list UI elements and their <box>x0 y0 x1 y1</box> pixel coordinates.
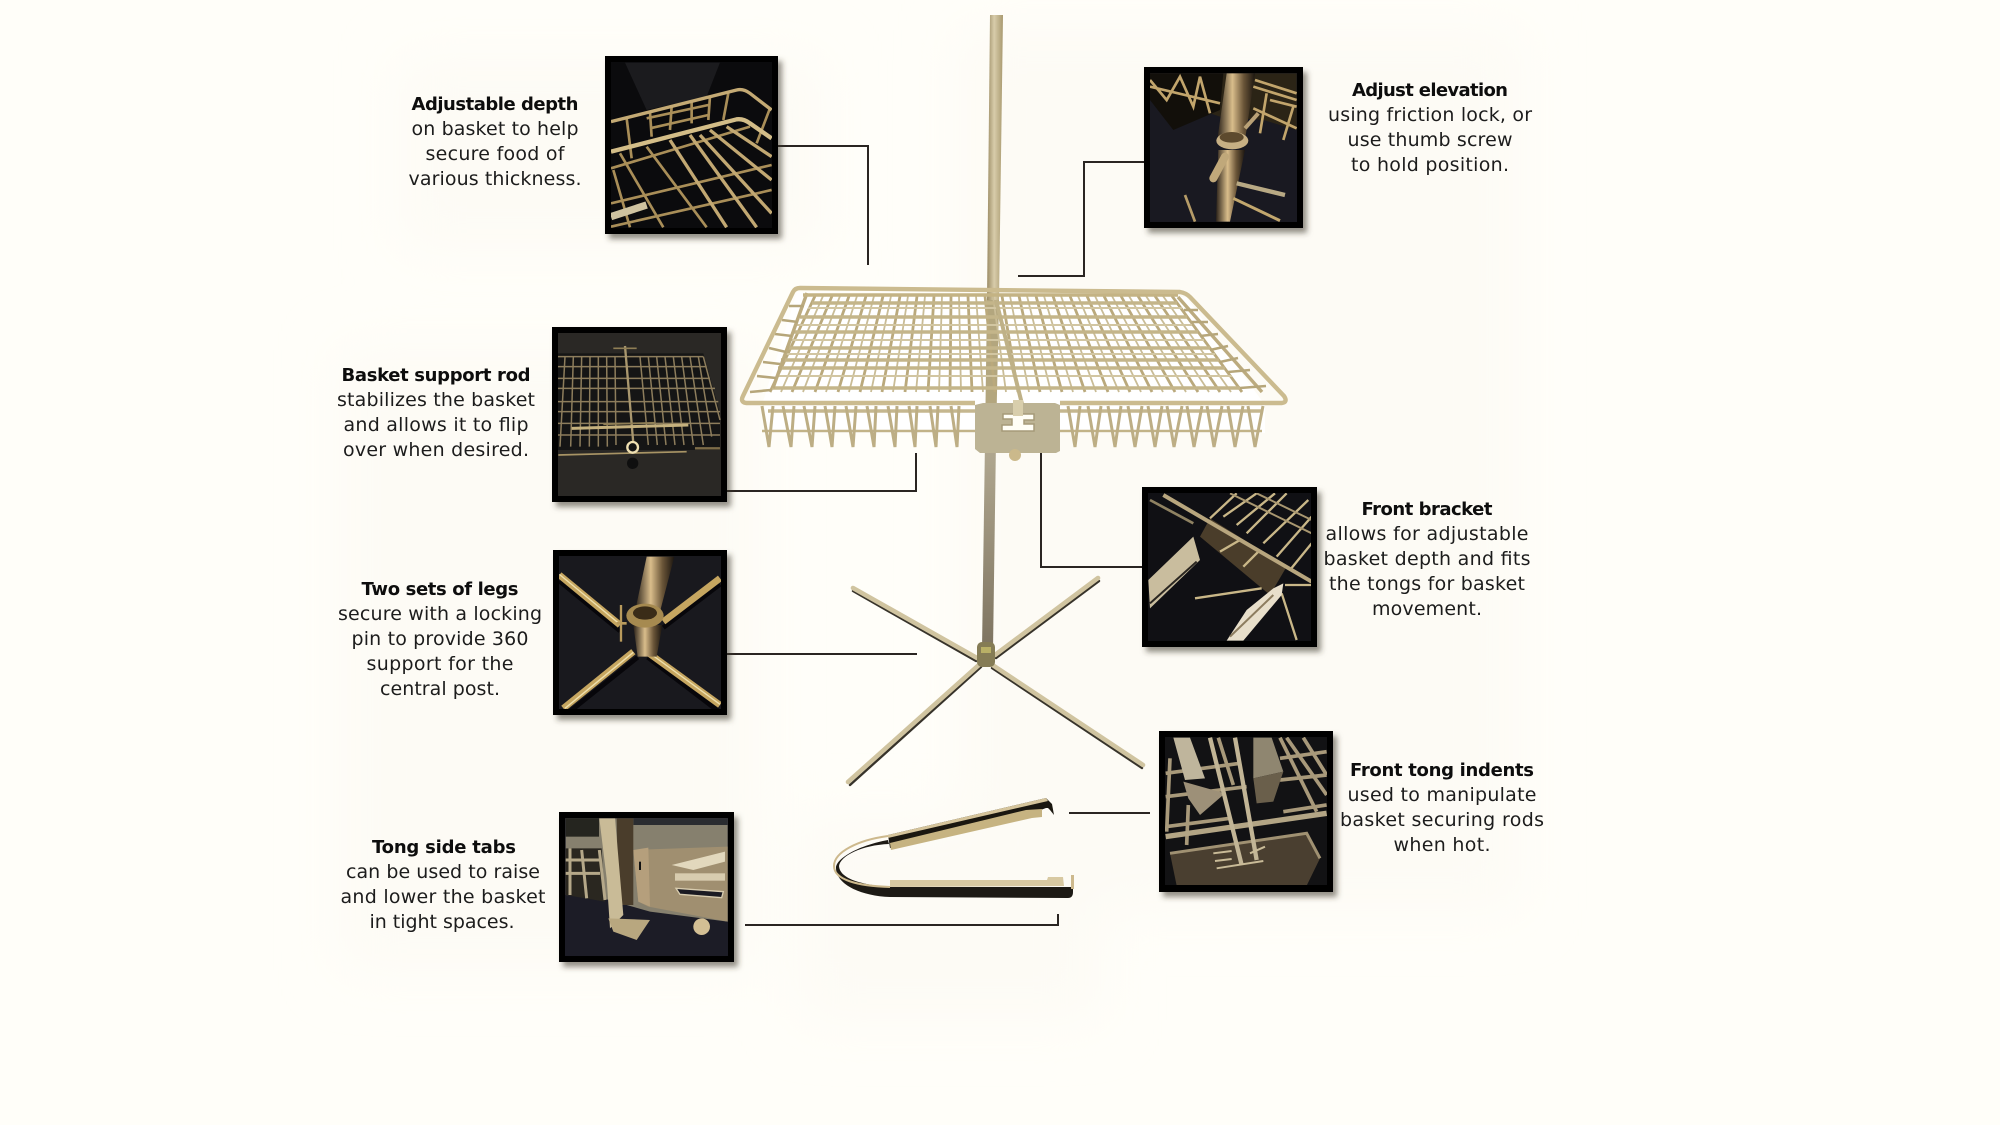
text: adjust elevation: to hold position. <box>1351 154 1509 176</box>
leader line: front bracket <box>1041 453 1142 567</box>
text: basket support rod: over when desired. <box>343 439 529 461</box>
text: basket support rod: stabilizes the basket <box>337 389 535 411</box>
text: adjustable depth: secure food of <box>426 143 566 165</box>
text: adjust elevation: Adjust elevation <box>1352 80 1508 101</box>
text: adjust elevation <box>1328 80 1532 176</box>
text: two sets of legs: central post. <box>380 678 500 700</box>
text: adjustable depth: various thickness. <box>408 168 582 190</box>
text: basket support rod: and allows it to flip <box>344 414 528 436</box>
stand legs <box>848 578 1143 785</box>
text: basket support rod: Basket support rod <box>342 365 530 386</box>
text: tong side tabs: can be used to raise <box>346 861 540 883</box>
text: front bracket: basket depth and fits <box>1324 548 1530 570</box>
central post <box>982 15 1003 650</box>
leader line: two sets of legs <box>727 653 917 655</box>
text: two sets of legs <box>338 579 542 700</box>
callout: tong side tabs <box>340 812 734 962</box>
text: adjustable depth <box>408 94 582 190</box>
photo: locking pin and legs detail <box>553 550 727 715</box>
text: two sets of legs: support for the <box>366 653 514 675</box>
text: two sets of legs: Two sets of legs <box>362 579 518 600</box>
text: front tong indents: Front tong indents <box>1350 760 1534 781</box>
text: tong side tabs: and lower the basket <box>340 886 546 908</box>
tongs <box>834 798 1074 898</box>
text: adjust elevation: using friction lock, or <box>1328 104 1532 126</box>
text: front bracket: the tongs for basket <box>1329 573 1525 595</box>
infographic: basket stand with feature callouts <box>338 15 1544 972</box>
text: front bracket: Front bracket <box>1362 499 1493 520</box>
photo: front bracket detail <box>1142 487 1317 647</box>
text: adjust elevation: use thumb screw <box>1348 129 1512 151</box>
text: adjustable depth: Adjustable depth <box>412 94 578 115</box>
text: front tong indents: when hot. <box>1394 834 1490 856</box>
callout: front tong indents <box>1159 731 1544 892</box>
text: tong side tabs: Tong side tabs <box>372 837 516 858</box>
leader line: adjust elevation <box>1018 162 1144 276</box>
text: front tong indents <box>1340 760 1544 856</box>
text: front bracket <box>1324 499 1530 620</box>
text: adjustable depth: on basket to help <box>412 118 578 140</box>
text: front bracket: movement. <box>1372 598 1482 620</box>
callout: adjustable depth <box>408 56 778 234</box>
photo: tong indents detail <box>1159 731 1333 892</box>
product photo: basket stand <box>742 15 1286 898</box>
callout: front bracket <box>1142 487 1530 647</box>
photo: friction lock detail <box>1144 67 1303 228</box>
leader line: tong side tabs <box>745 914 1058 925</box>
leader line: basket support rod <box>727 453 916 491</box>
front bracket on basket <box>975 400 1060 461</box>
photo: side tab detail <box>559 812 734 962</box>
text: front tong indents: basket securing rods <box>1340 809 1544 831</box>
callout: two sets of legs <box>338 550 727 715</box>
callout: basket support rod <box>337 327 727 502</box>
text: tong side tabs <box>340 837 546 933</box>
text: basket support rod <box>337 365 535 461</box>
text: two sets of legs: pin to provide 360 <box>352 628 528 650</box>
wire basket <box>742 288 1286 447</box>
photo: support rod detail <box>552 327 727 502</box>
text: front tong indents: used to manipulate <box>1348 784 1536 806</box>
callout: adjust elevation <box>1144 67 1532 228</box>
text: front bracket: allows for adjustable <box>1326 523 1528 545</box>
leader line: adjustable depth <box>778 146 868 265</box>
text: two sets of legs: secure with a locking <box>338 603 542 625</box>
text: tong side tabs: in tight spaces. <box>370 911 514 933</box>
photo: basket depth detail <box>605 56 778 234</box>
leader line: front tong indents <box>1069 812 1150 814</box>
